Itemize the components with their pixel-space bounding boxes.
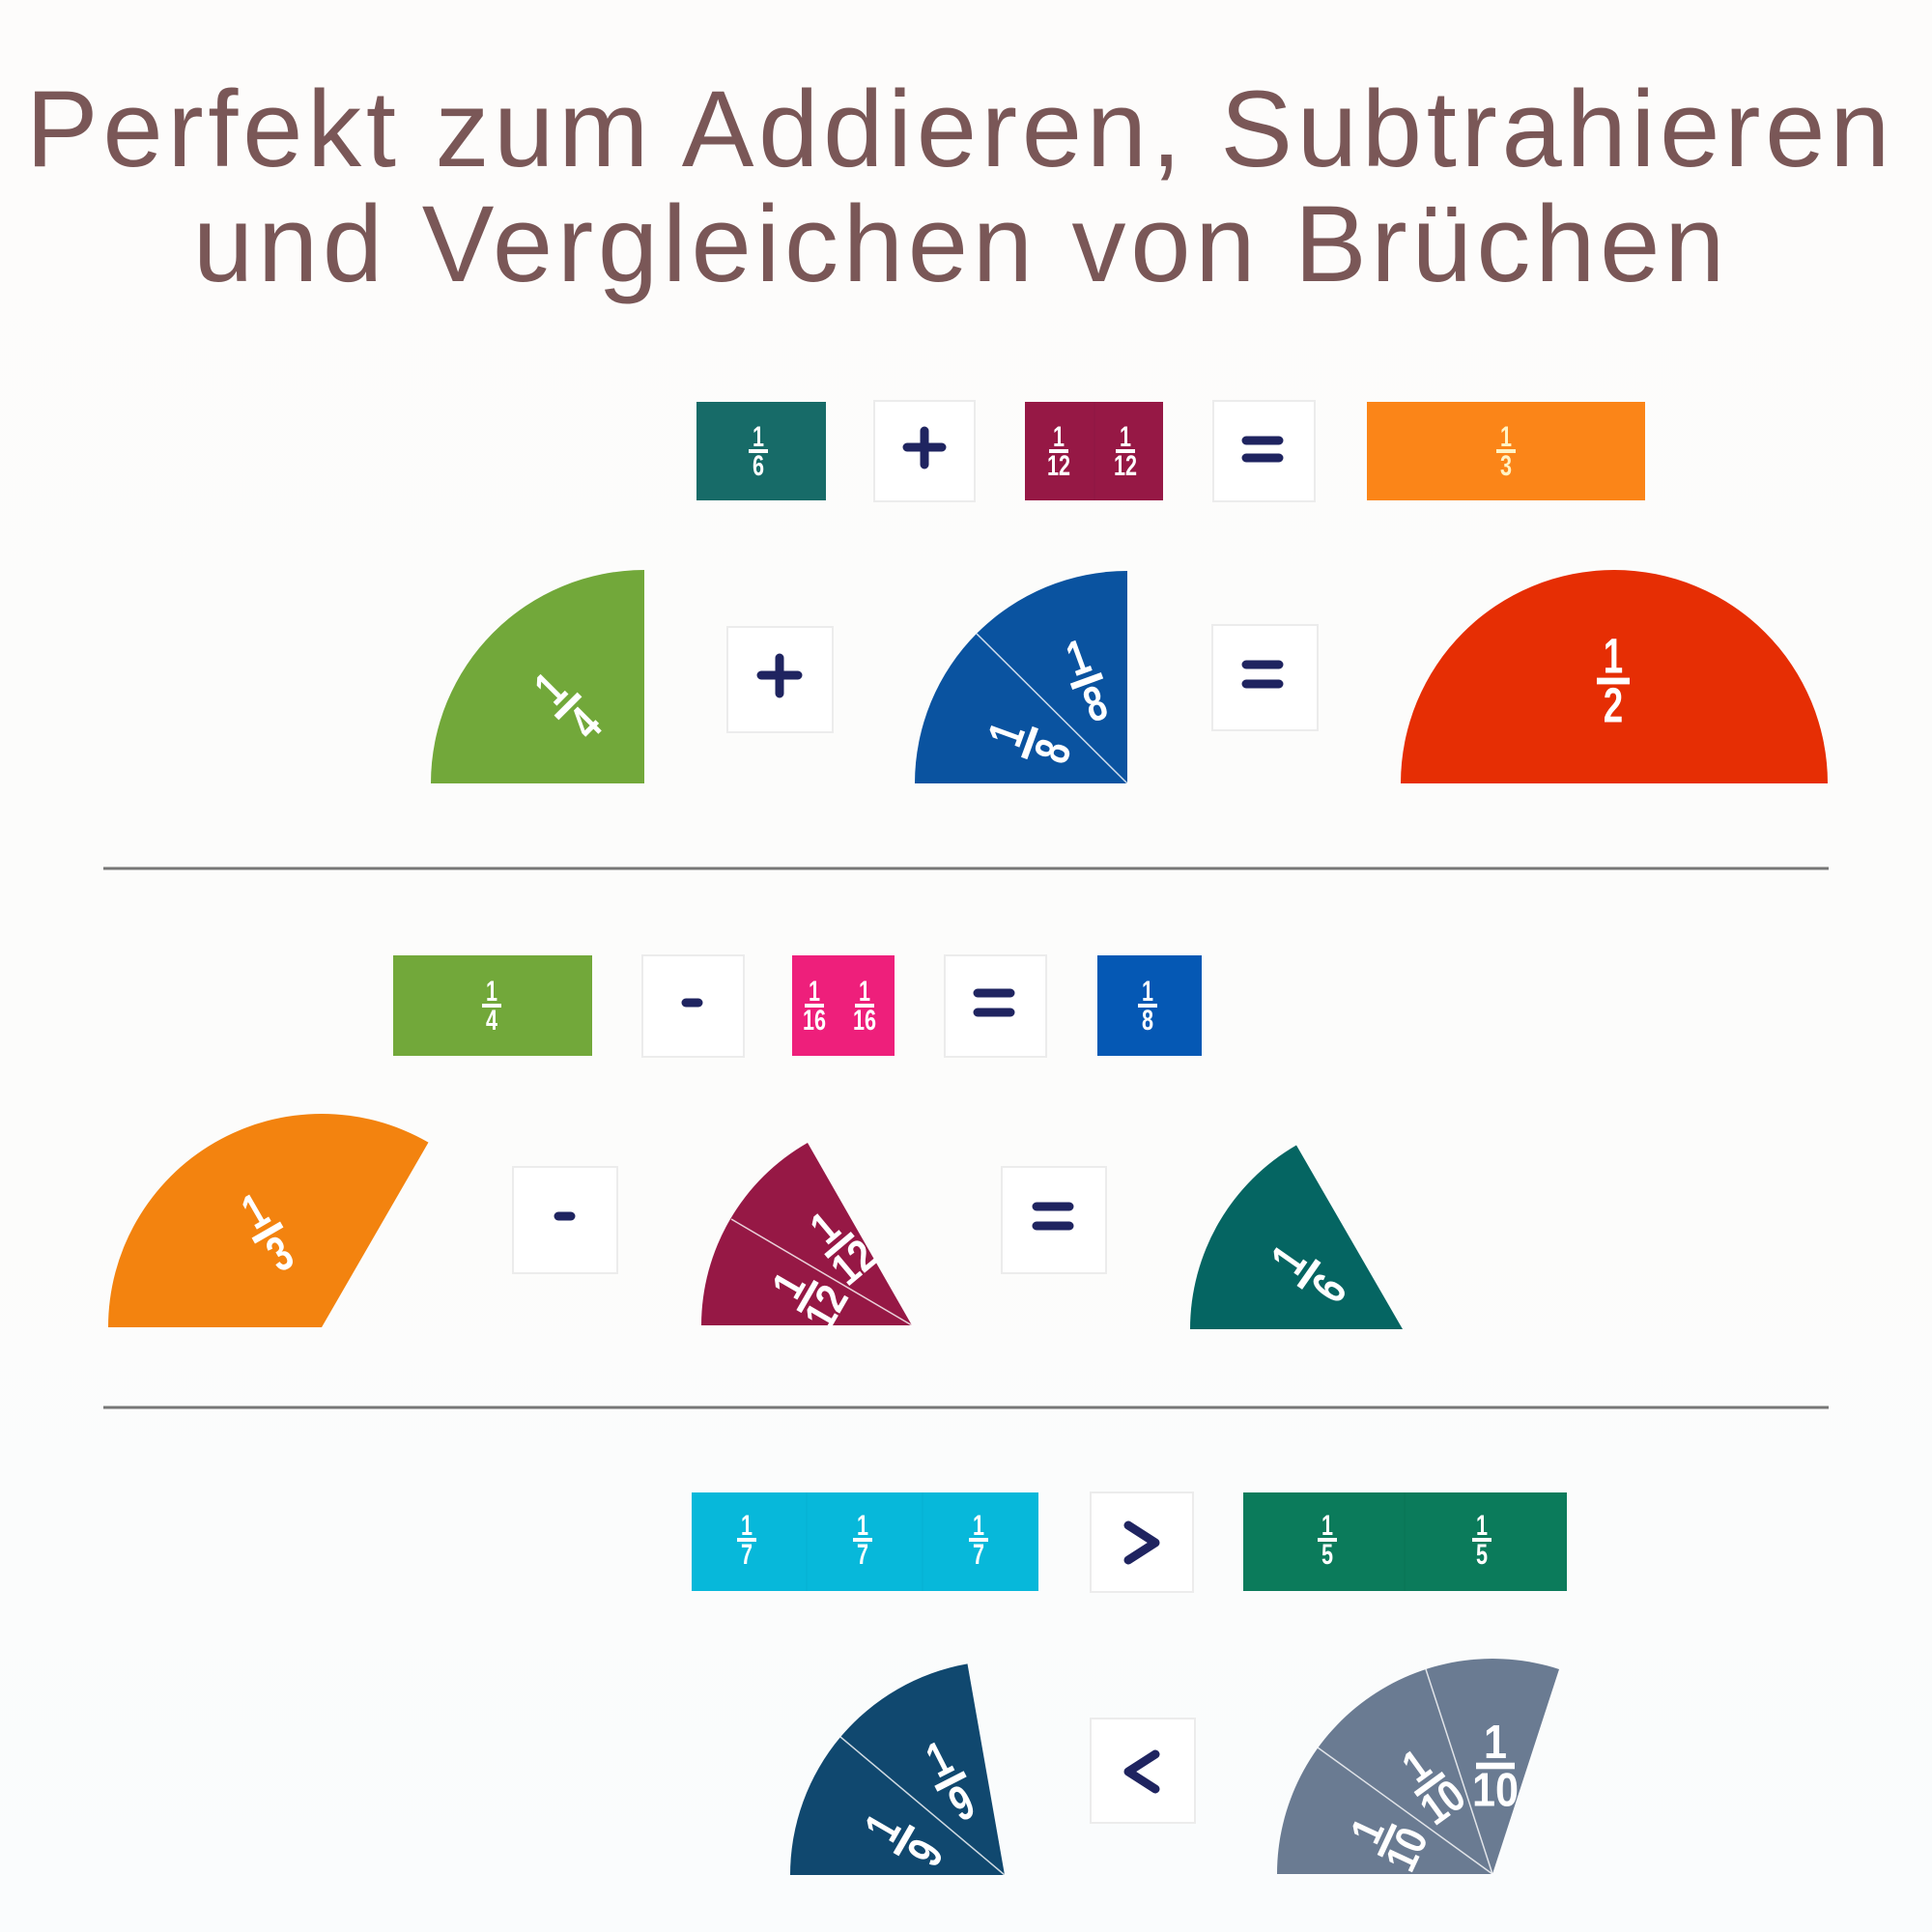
minus sign box bbox=[513, 1167, 617, 1273]
bar: one third: 1 bbox=[1500, 419, 1512, 453]
bar: two sixteenths: 1 bbox=[859, 974, 870, 1008]
bar: two sixteenths bbox=[792, 955, 895, 1056]
sector: two twelfths: 1 bbox=[762, 1264, 814, 1306]
equals sign box bbox=[1213, 401, 1315, 501]
bar: two twelfths: 12 bbox=[1047, 448, 1070, 482]
bar: one quarter: 1 bbox=[486, 974, 497, 1008]
sector: two twelfths: 1 bbox=[801, 1203, 849, 1254]
panel: comparison bbox=[692, 1492, 1567, 1881]
bar: one sixth: 1 bbox=[753, 419, 764, 453]
sector: two eighths: 8 bbox=[1077, 675, 1114, 733]
bar: two twelfths: 1 bbox=[1120, 419, 1131, 453]
minus sign box bbox=[642, 955, 744, 1057]
sector: three tenths: 1 bbox=[1341, 1811, 1394, 1851]
bar: two twelfths: 12 bbox=[1114, 448, 1137, 482]
bar: two fifths: 5 bbox=[1476, 1537, 1488, 1571]
sector: one quarter: 1 bbox=[525, 663, 577, 715]
sector: three tenths: 1 bbox=[1484, 1715, 1507, 1768]
semicircle: one half: 1 bbox=[1604, 630, 1623, 684]
bar: one sixth: 6 bbox=[753, 448, 764, 482]
bar: three sevenths: 1 bbox=[857, 1508, 868, 1542]
sector: two twelfths bbox=[701, 1143, 912, 1337]
sector: one quarter: 4 bbox=[559, 697, 612, 750]
sector: three tenths: 10 bbox=[1411, 1770, 1475, 1835]
bar: one eighth: 1 bbox=[1142, 974, 1153, 1008]
greater-than sign box bbox=[1091, 1492, 1193, 1592]
sector: three tenths: 1 bbox=[1393, 1740, 1440, 1793]
sector: three tenths: 10 bbox=[1376, 1820, 1437, 1879]
sector: one quarter bbox=[431, 570, 644, 783]
bar: two fifths: 5 bbox=[1321, 1537, 1333, 1571]
sector: two eighths: 1 bbox=[1060, 629, 1097, 687]
bar: two sixteenths: 1 bbox=[809, 974, 820, 1008]
title: Perfekt zum Addieren, Subtrahieren bbox=[26, 69, 1894, 189]
sector: three tenths: 10 bbox=[1472, 1762, 1519, 1816]
equals sign box bbox=[945, 955, 1046, 1057]
bar: three sevenths: 7 bbox=[857, 1537, 868, 1571]
sector: two ninths: 1 bbox=[919, 1731, 960, 1788]
bar: three sevenths: 7 bbox=[973, 1537, 984, 1571]
semicircle: one half: 2 bbox=[1604, 679, 1623, 733]
sector: one sixth: 6 bbox=[1301, 1264, 1357, 1312]
bar: two fifths: 1 bbox=[1476, 1508, 1488, 1542]
bar: two fifths: 1 bbox=[1321, 1508, 1333, 1542]
sector: two ninths: 9 bbox=[941, 1775, 983, 1833]
bar: one third bbox=[1367, 402, 1645, 500]
title: und Vergleichen von Brüchen bbox=[193, 184, 1729, 304]
bar: two sixteenths: 16 bbox=[853, 1003, 876, 1037]
sector: two eighths bbox=[915, 571, 1127, 783]
sector: two ninths bbox=[790, 1663, 1005, 1881]
bar: two twelfths: 1 bbox=[1053, 419, 1065, 453]
title bbox=[26, 69, 1894, 304]
panel: subtraction bbox=[108, 955, 1403, 1337]
bar: one third: 3 bbox=[1500, 448, 1512, 482]
bar: one quarter bbox=[393, 955, 592, 1056]
panel: addition bbox=[431, 401, 1828, 783]
plus sign box bbox=[874, 401, 975, 501]
sector: one third bbox=[108, 1114, 429, 1327]
bar: three sevenths: 1 bbox=[973, 1508, 984, 1542]
sector: two twelfths: 12 bbox=[822, 1230, 886, 1295]
sector: two eighths: 1 bbox=[978, 716, 1036, 753]
equals sign box bbox=[1002, 1167, 1106, 1273]
sector: one sixth: 1 bbox=[1262, 1236, 1317, 1284]
bar: three sevenths: 1 bbox=[741, 1508, 753, 1542]
sector: one sixth bbox=[1190, 1146, 1403, 1329]
bar: one eighth bbox=[1097, 955, 1202, 1056]
plus sign box bbox=[727, 627, 833, 732]
bar: three sevenths: 7 bbox=[741, 1537, 753, 1571]
bar: two fifths bbox=[1243, 1492, 1567, 1591]
less-than sign box bbox=[1091, 1719, 1195, 1823]
bar: one eighth: 8 bbox=[1142, 1003, 1153, 1037]
sector: two ninths: 1 bbox=[855, 1806, 912, 1850]
bar: one quarter: 4 bbox=[486, 1003, 497, 1037]
sector: one third: 1 bbox=[234, 1183, 277, 1240]
bar: three sevenths bbox=[692, 1492, 1038, 1591]
sector: one third: 3 bbox=[258, 1226, 302, 1283]
sector: two twelfths: 12 bbox=[794, 1277, 858, 1337]
equals sign box bbox=[1212, 625, 1318, 730]
sector: three tenths bbox=[1277, 1659, 1559, 1879]
bar: one sixth bbox=[696, 402, 826, 500]
sector: two ninths: 9 bbox=[897, 1831, 954, 1875]
sector: two eighths: 8 bbox=[1024, 733, 1082, 770]
bar: two sixteenths: 16 bbox=[803, 1003, 826, 1037]
semicircle: one half bbox=[1401, 570, 1828, 783]
bar: two twelfths bbox=[1025, 402, 1163, 500]
